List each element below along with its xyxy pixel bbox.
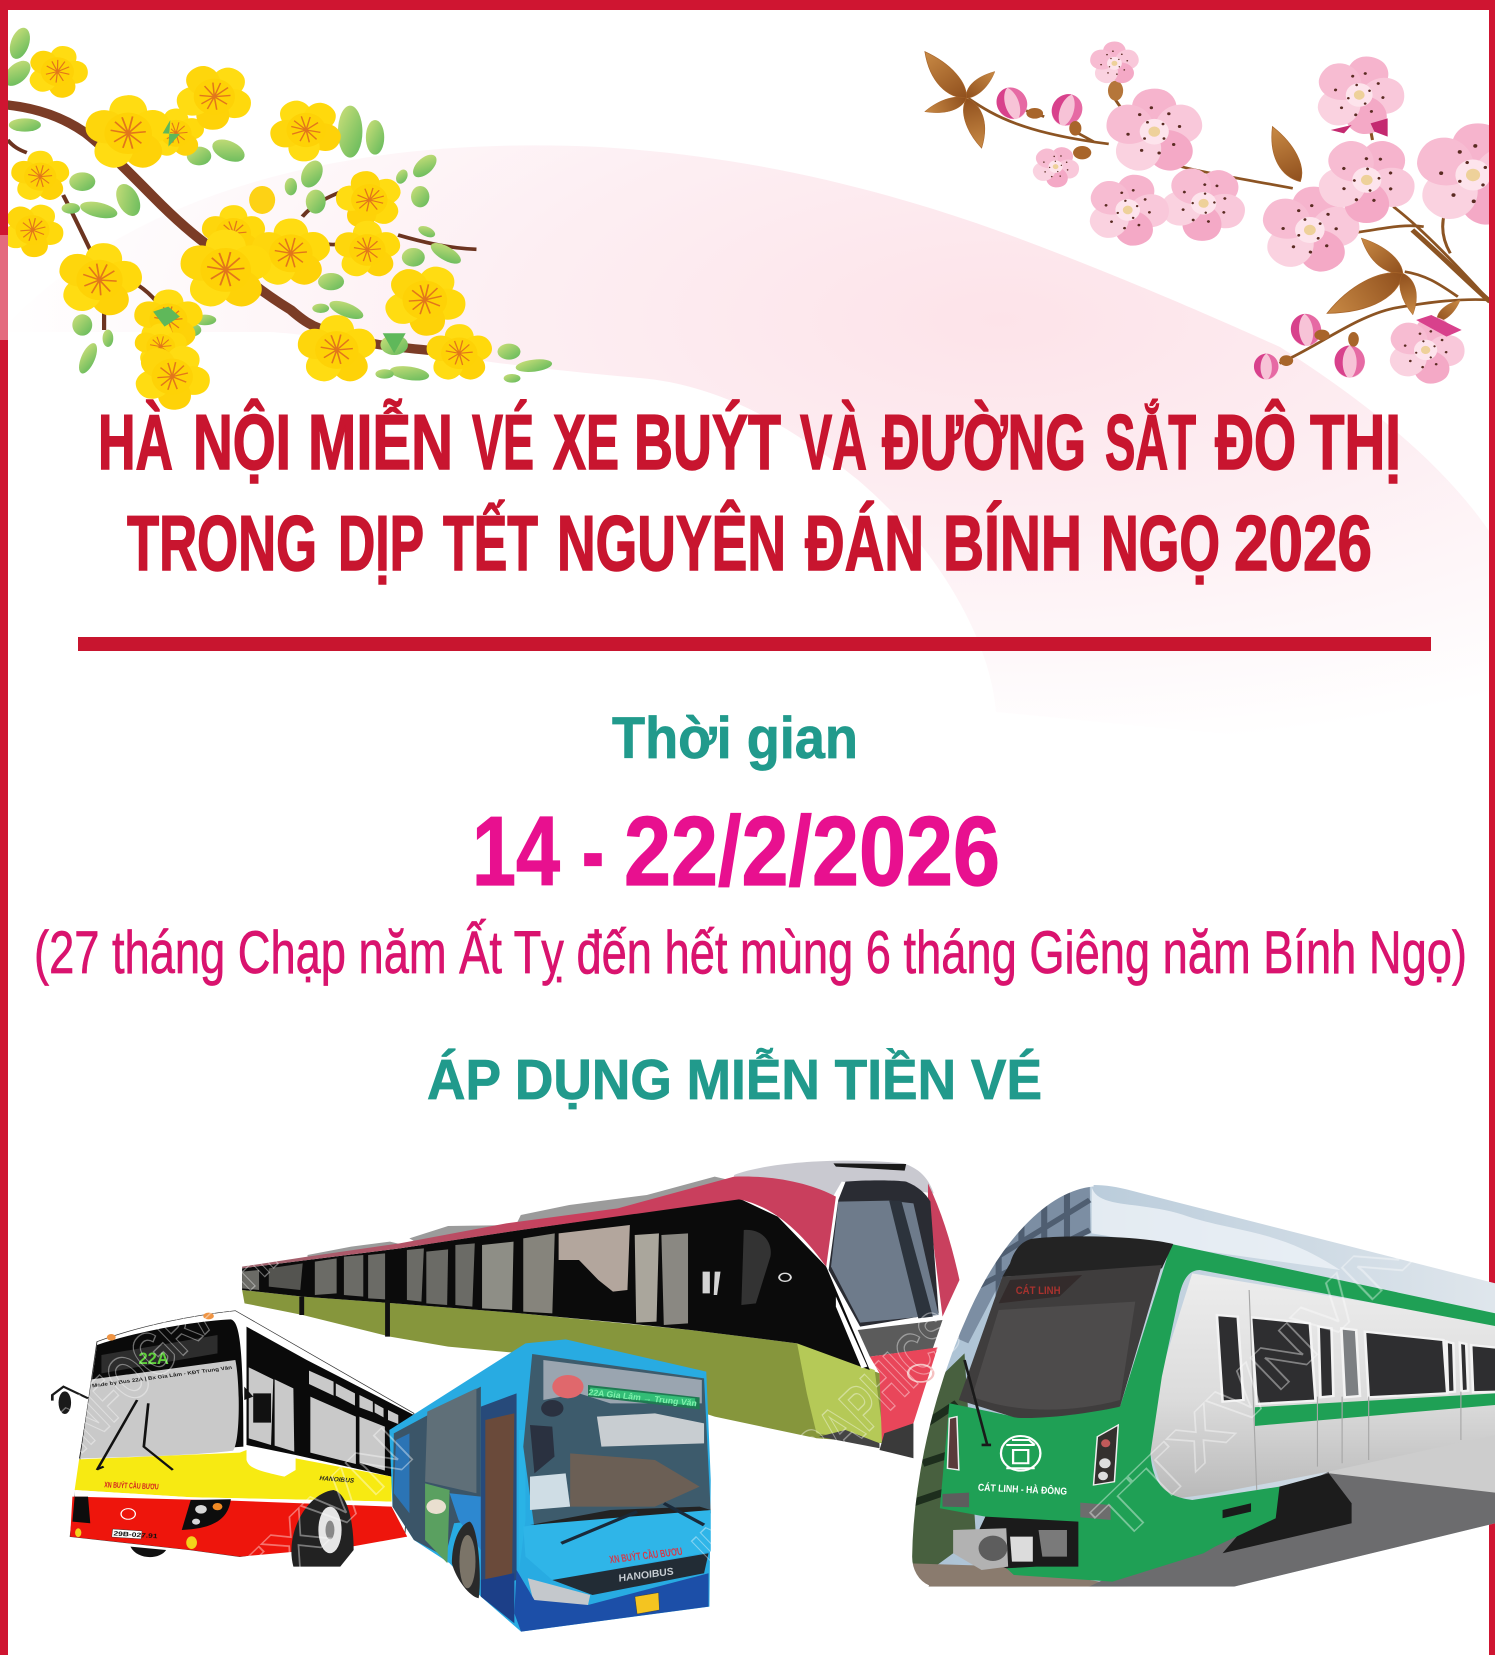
title: 2026 [1234,499,1372,587]
title: XE [553,398,619,486]
title: TRONG [127,499,317,587]
watermark: TTXVN [1080,1309,1331,1555]
pink swoosh background [0,145,1495,760]
blue Hanoi bus: 22A Gia Lâm → Trung Văn [588,1388,698,1409]
metro train (Nhon line, red and olive) [242,1161,959,1458]
title: BÍNH [943,499,1082,587]
title: MIỄN [308,398,453,486]
heading: applies free of charge: ÁP DỤNG MIỄN TIỀN VÉ [427,1047,1042,1112]
title: THỊ [1310,398,1401,486]
left headlight [947,1417,959,1470]
title: NỘI [193,398,291,486]
watermark: INFOGRAPHICS [40,1177,334,1465]
watermark: INFOGRAPHICS [680,1297,974,1585]
yellow and red Hanoi bus: XN BUÝT CẦU BƯƠU [104,1480,159,1492]
title: ĐÔ [1215,398,1296,486]
right headlight [1094,1425,1118,1485]
title: DỊP [338,499,424,587]
yellow and red Hanoi bus [52,1311,414,1567]
title: HÀ [98,398,173,486]
route name on train nose: CÁT LINH - HÀ ĐÔNG [978,1481,1067,1498]
peach blossom branch (pink dao flowers) [915,42,1495,397]
title: VÉ [472,398,534,486]
green Cat Linh - Ha Dong train with scenic backdrop: CÁT LINH [1016,1283,1061,1297]
title: SẮT [1105,398,1196,486]
title: TẾT [443,499,538,587]
blue Hanoi bus: XN BUÝT CẦU BƯƠU [608,1545,684,1566]
yellow and red Hanoi bus: 22A [138,1350,169,1368]
divider rule [78,637,1431,651]
Hanoi emblem on train nose [1001,1436,1040,1471]
title: NGUYÊN [557,499,786,587]
heading: time: Thời gian [612,706,858,771]
blue Hanoi bus: HANOIBUS [617,1565,675,1584]
date range: - [582,796,604,906]
green Cat Linh - Ha Dong train with scenic backdrop [900,1170,1495,1593]
apricot blossom branch (yellow mai flowers) [0,26,553,425]
title [98,398,1401,587]
title: ĐÁN [805,499,924,587]
date range [472,796,1000,906]
title: NGỌ [1101,499,1220,587]
title: BUÝT [634,398,781,486]
date range: 22/2/2026 [624,796,1000,906]
watermark [40,1162,1481,1655]
watermark: VNA [1280,1162,1481,1360]
title: VÀ [800,398,867,486]
yellow and red Hanoi bus: Made by Bus 22A | Bx Gia Lâm - KĐT Trung Văn [92,1366,233,1389]
title: ĐƯỜNG [882,398,1086,486]
yellow and red Hanoi bus: 29B-027.91 [113,1530,158,1540]
date range: 14 [472,796,560,906]
blue Hanoi bus [389,1339,711,1632]
yellow and red Hanoi bus: HANOIBUS [319,1474,355,1484]
watermark: TTXVN [175,1414,426,1655]
